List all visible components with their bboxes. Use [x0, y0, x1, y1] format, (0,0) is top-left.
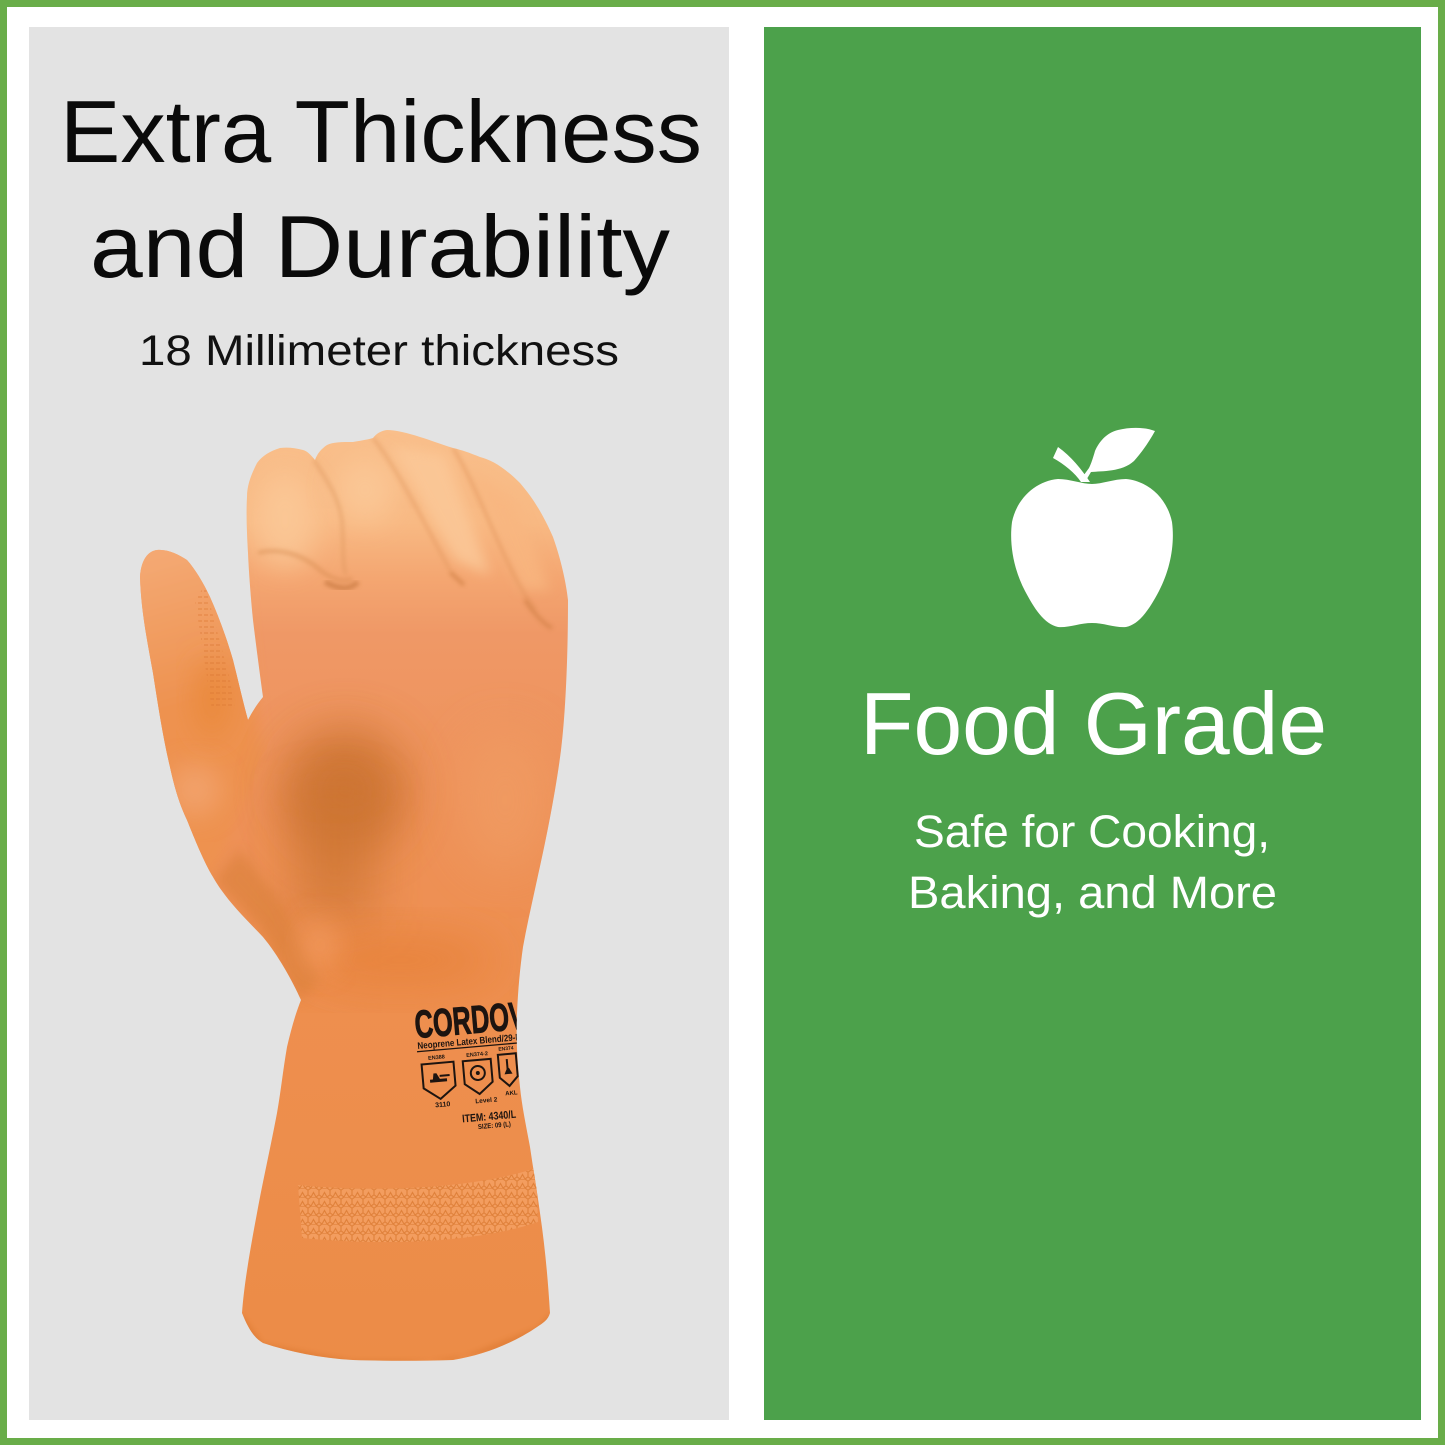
hexagon grip band	[298, 1168, 538, 1242]
panel: food grade (right)	[764, 27, 1421, 1420]
heading: extra thickness	[60, 82, 702, 296]
wrist left fold	[216, 854, 312, 998]
heading: extra thickness: and Durability	[90, 197, 670, 296]
printed label: SIZE: 09 (L)	[478, 1121, 511, 1131]
icon: cut shield: 3110	[435, 1101, 451, 1109]
heading: extra thickness: Extra Thickness	[60, 82, 702, 181]
heading: food grade: Food Grade	[860, 674, 1327, 773]
icon: chemical shield: EN374	[498, 1045, 514, 1053]
icon: chemical shield	[497, 1045, 519, 1098]
highlighted fingers	[253, 472, 317, 568]
printed label	[415, 1002, 519, 1129]
icon: cut shield: EN388	[428, 1054, 445, 1062]
printed label: ITEM: 4340/L	[462, 1109, 517, 1125]
icon: cut shield	[421, 1054, 457, 1110]
printed label: CORDOVA	[413, 993, 544, 1047]
text: thickness detail: 18 Millimeter thickness	[139, 327, 619, 375]
thumb shading	[140, 550, 260, 877]
icon: biohazard shield: Level 2	[475, 1096, 498, 1105]
printed label: Neoprene Latex Blend/29-MIL	[417, 1031, 530, 1052]
text: food grade detail: Safe for Cooking,	[914, 806, 1270, 857]
icon: biohazard shield: EN374-2	[466, 1051, 488, 1059]
cuff shading	[243, 1316, 549, 1361]
dark hollow on back of hand	[283, 728, 407, 852]
panel: thickness (left)	[29, 27, 729, 1420]
icon: chemical shield: AKL	[505, 1090, 518, 1097]
glove illustration	[130, 420, 580, 1370]
icon: apple	[1011, 428, 1173, 627]
text: food grade detail: Baking, and More	[908, 867, 1277, 918]
finger creases	[314, 460, 345, 558]
icon: biohazard shield	[462, 1051, 498, 1106]
text: food grade detail	[908, 806, 1277, 918]
